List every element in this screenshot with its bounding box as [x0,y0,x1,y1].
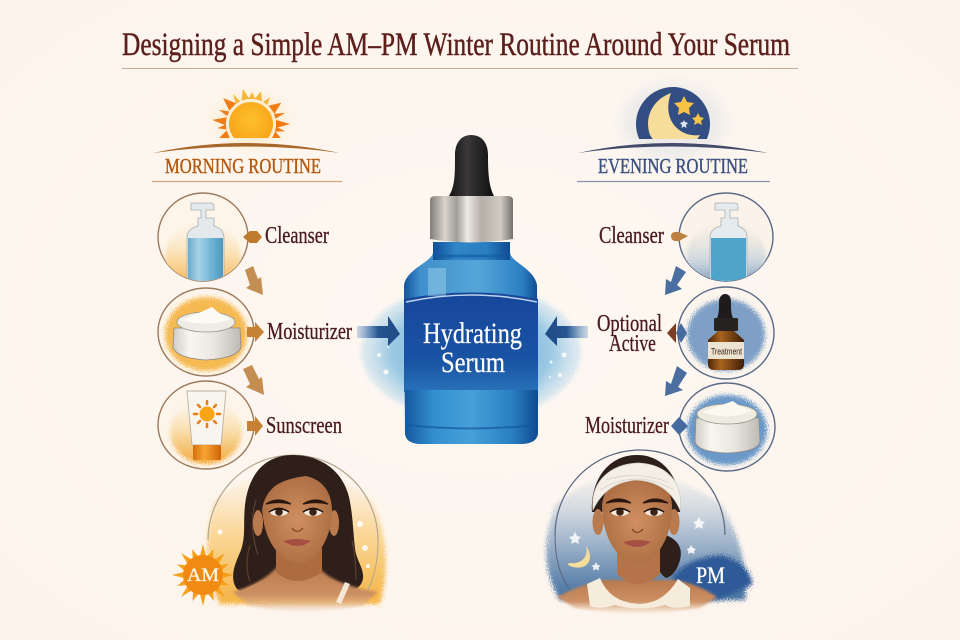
badge: AM sun [172,544,234,606]
ears [253,510,263,536]
brows, eyes, nose, lips [266,500,328,546]
PM step 2 label: Optional [597,311,662,337]
moon and stars [568,546,590,568]
serum name: Hydrating [423,317,522,350]
PM badge [672,555,752,600]
icon: night moon [621,84,725,161]
bottle shoulders and glass [404,242,538,444]
shoulders [232,566,378,611]
ears [592,509,604,535]
PM step 2 label [597,311,687,357]
dropper bulb [449,135,494,196]
AM step 1: cleanser [158,193,248,294]
arrow into serum from morning [357,316,400,346]
label band [404,292,538,392]
night backdrop [546,472,746,600]
silver collar [430,196,513,242]
PM step 2: optional active: Treatment [711,346,742,358]
portrait: evening: PM [696,563,725,588]
arrow: moisturizer to sunscreen [243,365,264,395]
heading: morning routine: MORNING ROUTINE [165,154,321,178]
neck [617,548,660,584]
AM step 1 label: Cleanser [265,223,329,249]
AM step 2: moisturizer [158,288,254,376]
infographic canvas [122,32,798,614]
arrow: cleanser to moisturizer [245,266,263,295]
AM step 1 label [243,223,329,249]
portrait: evening [546,450,752,613]
brows, eyes, nose, lips [606,499,668,547]
PM step 1 label: Cleanser [599,223,664,249]
heading: evening routine: EVENING ROUTINE [598,154,748,178]
arrow: PM active to moisturizer [665,366,687,396]
AM step 2 label [247,319,352,345]
arrow into serum from evening [545,316,588,346]
hair [233,455,363,591]
serum bottle [404,135,538,444]
portrait: morning [207,455,386,611]
AM step 3: sunscreen [158,381,254,469]
shoulders and tank top [557,580,717,613]
AM step 2 label: Moisturizer [267,319,352,345]
headband [593,463,681,510]
serum name: Serum [441,346,505,379]
badge: AM sun: AM [187,565,219,586]
face [602,478,672,564]
arrow: PM cleanser to active [665,266,686,295]
serum name [423,317,522,379]
PM step 3 label: Moisturizer [585,413,669,439]
PM step 1: cleanser [679,193,773,294]
icon: morning sun [212,88,290,150]
hair and ponytail [592,455,680,512]
PM step 2 label: Active [609,331,656,357]
neck [276,548,322,581]
PM step 3: moisturizer [679,383,775,471]
heading: morning routine [152,143,342,182]
sunny backdrop [207,470,386,604]
hair front [255,461,335,512]
lower liquid [405,390,538,444]
face [262,476,332,564]
PM step 2: optional active [678,287,774,379]
heading: evening routine [577,143,770,182]
AM step 3 label: Sunscreen [266,413,342,439]
glow behind serum [361,284,581,420]
AM step 3 label [247,413,342,439]
